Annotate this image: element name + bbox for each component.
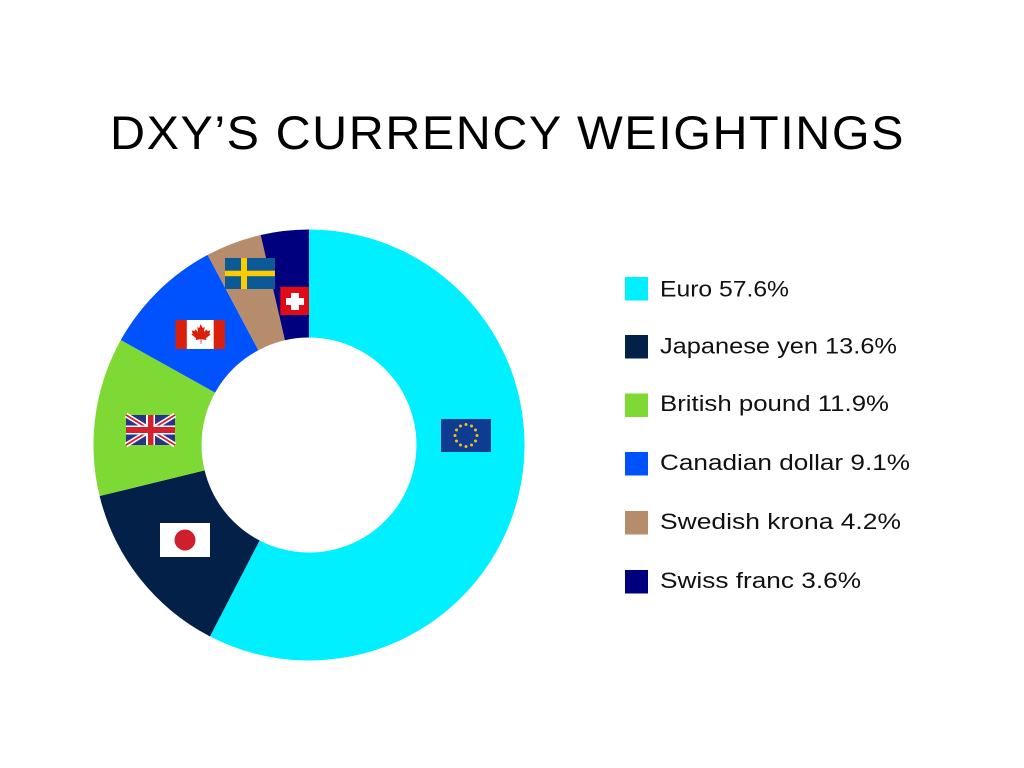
donut chart	[93, 229, 525, 660]
icon: Japan flag	[160, 523, 210, 557]
legend item: Japanese yen: Japanese yen 13.6%	[660, 334, 897, 358]
icon: EU flag	[441, 419, 491, 452]
slice: Swiss franc 3.6%	[261, 230, 309, 340]
slice: Canadian dollar 9.1%	[121, 255, 258, 393]
slice: British pound 11.9%	[93, 340, 215, 496]
slice: Japanese yen 13.6%	[100, 470, 260, 636]
legend item: British pound: British pound 11.9%	[660, 391, 889, 416]
title: DXY’S CURRENCY WEIGHTINGS	[110, 106, 905, 159]
legend item: Euro: Euro 57.6%	[660, 277, 789, 302]
legend item: Swedish krona: Swedish krona 4.2%	[660, 509, 901, 534]
icon: UK flag	[126, 415, 175, 445]
icon: Sweden flag	[225, 258, 275, 289]
legend item: Canadian dollar: Canadian dollar 9.1%	[660, 450, 910, 475]
slice: Euro 57.6%	[210, 229, 525, 660]
slice: Swedish krona 4.2%	[208, 235, 285, 350]
legend	[625, 277, 910, 594]
icon: Switzerland flag	[280, 287, 309, 315]
legend item: Swiss franc: Swiss franc 3.6%	[660, 568, 861, 593]
icon: Canada flag	[176, 320, 225, 349]
